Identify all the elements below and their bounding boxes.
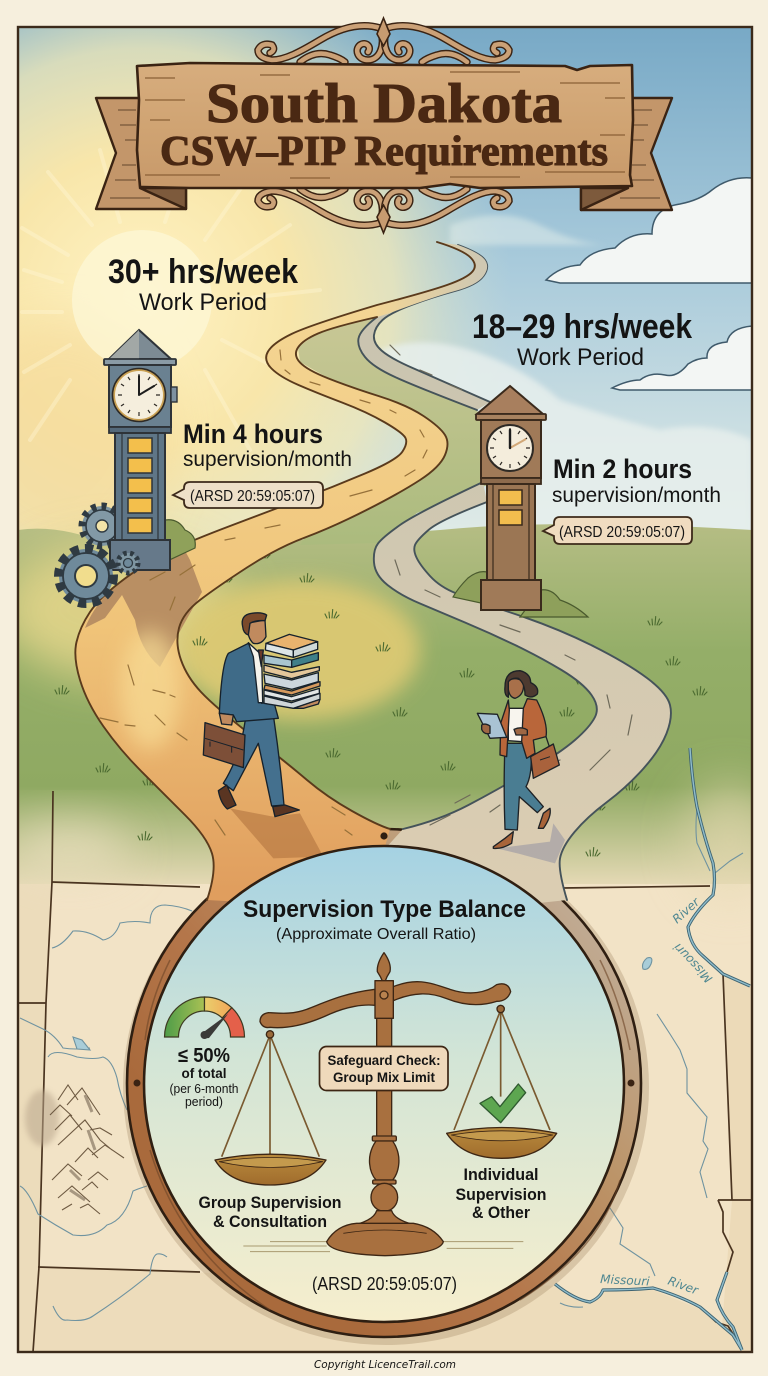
gauge text: at most 50 percent of total: of total bbox=[182, 1065, 226, 1081]
sign: safeguard check: Group Mix Limit bbox=[333, 1069, 435, 1085]
right chains and pan bbox=[447, 1005, 557, 1158]
label: min 2 hours supervision: Min 2 hours bbox=[553, 454, 692, 484]
label: group supervision and consultation bbox=[198, 1193, 342, 1231]
clock tower: 18-29 hrs bbox=[453, 386, 588, 617]
label: individual supervision and other: Individual bbox=[464, 1165, 538, 1184]
gauge text: at most 50 percent of total bbox=[170, 1045, 239, 1109]
sign: safeguard check bbox=[320, 1046, 448, 1090]
balance scale bbox=[215, 953, 557, 1256]
map labels: Missouri River: Missouri bbox=[670, 940, 715, 986]
gauge text: at most 50 percent of total: period) bbox=[185, 1095, 223, 1109]
map labels: Missouri River: River bbox=[666, 1274, 701, 1298]
sign: safeguard check: Safeguard Check: bbox=[328, 1052, 440, 1068]
clock tower: 30+ hrs bbox=[59, 330, 195, 603]
label: 30+ hrs/week work period: 30+ hrs/week bbox=[108, 253, 298, 291]
magnifier lens interior bbox=[144, 846, 624, 1322]
sky bbox=[0, 27, 752, 560]
heading: supervision type balance: Supervision Type Balance bbox=[243, 896, 526, 923]
map labels: Missouri River: Missouri bbox=[600, 1272, 651, 1289]
magnifier ring frame bbox=[123, 829, 649, 1345]
map labels: Missouri River bbox=[600, 894, 715, 1298]
label: min 4 hours supervision bbox=[183, 419, 352, 471]
label: group supervision and consultation: & Consultation bbox=[213, 1212, 327, 1231]
callout: ARSD citation right bbox=[543, 517, 692, 544]
citation under scale: (ARSD 20:59:05:07) bbox=[312, 1274, 457, 1294]
ornament bottom bbox=[258, 189, 509, 233]
ground shadow bbox=[243, 1242, 523, 1252]
map mountains bbox=[25, 1085, 124, 1214]
left chains and pan bbox=[215, 1031, 326, 1185]
check mark bbox=[480, 1084, 526, 1123]
soft background clouds bbox=[380, 215, 752, 540]
map borders bbox=[18, 791, 752, 1352]
ribbon right bbox=[581, 98, 672, 210]
callout: ARSD citation right: (ARSD 20:59:05:07) bbox=[559, 524, 685, 541]
label: individual supervision and other bbox=[456, 1165, 546, 1222]
title text: South Dakota bbox=[206, 73, 562, 135]
person: man with books and briefcase bbox=[203, 613, 323, 858]
gauge: 50 percent limit bbox=[164, 997, 245, 1039]
road: gold 30+ hrs path bbox=[75, 242, 487, 905]
road: grey 18-29 hrs path bbox=[358, 245, 671, 905]
map labels: Missouri River: River bbox=[670, 894, 703, 926]
title banner bbox=[96, 18, 672, 233]
map rivers and lakes bbox=[20, 807, 743, 1320]
label: individual supervision and other: & Other bbox=[472, 1203, 530, 1222]
wooden board bbox=[137, 63, 633, 188]
callout: ARSD citation left: (ARSD 20:59:05:07) bbox=[190, 488, 315, 505]
label: 18-29 hrs/week work period: 18–29 hrs/week bbox=[472, 308, 692, 346]
label: 30+ hrs/week work period: Work Period bbox=[139, 289, 267, 316]
label: 30+ hrs/week work period bbox=[108, 253, 298, 316]
label: 18-29 hrs/week work period bbox=[472, 308, 692, 371]
label: individual supervision and other: Supervision bbox=[456, 1185, 546, 1204]
Missouri river bbox=[555, 748, 750, 1350]
label: min 2 hours supervision bbox=[552, 454, 721, 507]
person: woman with tablet and bag bbox=[477, 671, 565, 863]
cloud: upper right bbox=[546, 178, 752, 283]
label: group supervision and consultation: Group Supervision bbox=[198, 1193, 342, 1212]
map base bbox=[18, 860, 752, 1352]
callout: ARSD citation left bbox=[173, 482, 323, 508]
gauge text: at most 50 percent of total: (per 6-month bbox=[170, 1082, 239, 1096]
copyright: Copyright LicenceTrail.com bbox=[314, 1359, 456, 1371]
label: min 2 hours supervision: supervision/month bbox=[552, 484, 721, 507]
heading: supervision type balance: (Approximate Overall Ratio) bbox=[276, 926, 476, 943]
wood grain bbox=[145, 72, 625, 178]
cloud: right bbox=[612, 326, 752, 390]
label: 18-29 hrs/week work period: Work Period bbox=[517, 344, 644, 371]
label: min 4 hours supervision: Min 4 hours bbox=[183, 419, 323, 449]
label: min 4 hours supervision: supervision/month bbox=[183, 448, 352, 471]
gauge text: at most 50 percent of total: ≤ 50% bbox=[178, 1045, 230, 1067]
subtitle text: CSW–PIP Requirements bbox=[160, 129, 608, 175]
heading: supervision type balance bbox=[243, 896, 526, 943]
ornament top bbox=[258, 18, 509, 62]
column and beam bbox=[260, 953, 511, 1256]
ribbon left bbox=[96, 98, 186, 209]
hills and meadow bbox=[0, 317, 768, 900]
